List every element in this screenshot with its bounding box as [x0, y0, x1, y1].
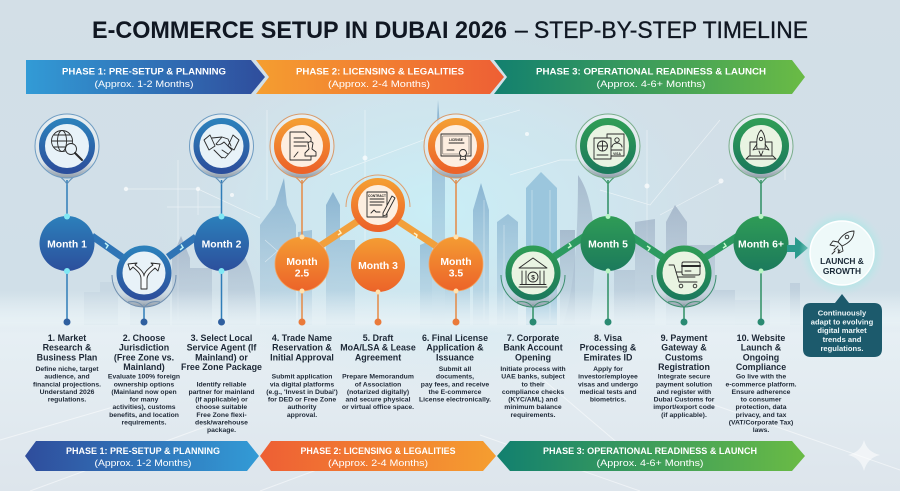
- timeline connectors: [92, 221, 738, 258]
- step 7 text: Bank Account: [503, 343, 563, 353]
- step 1 text: Understand 2026: [40, 389, 95, 396]
- step 8 text: Apply for: [593, 366, 623, 373]
- step 6 text: Application &: [426, 343, 484, 353]
- month 6+ node: Month 6+: [738, 240, 784, 250]
- step 8 text: visas and undergo: [578, 381, 638, 388]
- step 5 text: of Association: [355, 381, 401, 388]
- banner: phase 3 bottom: [497, 441, 805, 471]
- step 3 text: [181, 333, 262, 434]
- step 10 text: privacy, and tax: [736, 412, 787, 419]
- icon: market research globe: [35, 114, 99, 184]
- city skyline: [0, 100, 900, 334]
- step 7 text: compliance checks: [502, 389, 564, 396]
- step 10 text: (VAT/Corporate Tax): [729, 419, 793, 426]
- step 2 text: Evaluate 100% foreign: [108, 374, 180, 381]
- step 9 text: and register with: [657, 389, 711, 396]
- banner: phase 3 bottom: PHASE 3: OPERATIONAL READINESS & LAUNCH: [543, 446, 757, 456]
- step 7 text: (KYC/AML) and: [508, 397, 558, 404]
- step 1 text: regulations.: [48, 397, 86, 404]
- step 9 text: Integrate secure: [658, 374, 710, 381]
- step 5 text: 5. Draft: [363, 333, 393, 343]
- step 1 text: financial projections.: [33, 381, 101, 388]
- step 4 text: for DED or Free Zone: [268, 397, 336, 404]
- step 7 text: Initiate process with: [500, 366, 566, 373]
- month 3 node: [351, 238, 405, 294]
- step 10 text: e-commerce platform.: [725, 381, 797, 388]
- step 7 text: UAE banks, subject: [501, 374, 565, 381]
- step 9 text: Dubai Customs for: [654, 397, 715, 404]
- banner: phase 1 top: [26, 60, 265, 94]
- top phase banners: [26, 60, 805, 94]
- month 3.5 node: [429, 234, 483, 294]
- step 1 text: [33, 333, 101, 404]
- step 7 text: to their: [521, 381, 545, 388]
- step 4 text: Reservation &: [272, 343, 332, 353]
- callout: continuous adaptation: digital market: [817, 326, 867, 335]
- step 5 text: (notarized digitally): [347, 389, 409, 396]
- icon: fork arrows: [112, 248, 176, 308]
- step 2 text: [108, 333, 180, 426]
- banner: phase 2 top: (Approx. 2-4 Months): [328, 78, 430, 89]
- step 2 text: benefits, and location: [109, 412, 179, 419]
- month 2 node: [194, 214, 249, 274]
- banner: phase 3 top: [494, 60, 805, 94]
- step 6 text: the E-commerce: [429, 389, 482, 396]
- title: E-COMMERCE SETUP IN DUBAI 2026: [92, 17, 507, 44]
- icon: handshake: [190, 114, 254, 184]
- step 9 text: 9. Payment: [661, 333, 707, 343]
- icon: contract: CONTRACT: [368, 194, 386, 198]
- step 5 text: Agreement: [355, 352, 401, 362]
- launch and growth badge: [799, 210, 885, 296]
- step 6 text: Submit all: [439, 366, 471, 373]
- step 2 text: (Free Zone vs.: [114, 352, 174, 362]
- launch and growth badge: LAUNCH &: [820, 256, 864, 266]
- step 8 text: [578, 333, 638, 404]
- step 1 text: audience, and: [44, 374, 90, 381]
- title: – STEP-BY-STEP TIMELINE: [515, 17, 808, 44]
- month 3.5 node: Month: [440, 257, 472, 268]
- callout: continuous adaptation: adapt to evolving: [811, 317, 874, 326]
- month 2 node: Month 2: [202, 240, 242, 250]
- step 3 text: Identify reliable: [197, 381, 247, 388]
- step 1 text: Research &: [43, 343, 92, 353]
- launch and growth badge: GROWTH: [823, 266, 861, 276]
- month 2.5 node: 2.5: [295, 268, 309, 280]
- step 4 text: Initial Approval: [270, 352, 334, 362]
- step 9 text: Registration: [658, 362, 710, 372]
- step 3 text: desk/warehouse: [195, 419, 248, 426]
- step 3 text: Mainland) or: [195, 352, 248, 362]
- icon: shopping cart: [652, 248, 716, 308]
- step 4 text: authority: [287, 404, 317, 411]
- step 2 text: Mainland): [123, 362, 165, 372]
- icon: document and stamp: [270, 114, 334, 184]
- step 9 text: Gateway &: [661, 343, 707, 353]
- step 9 text: (if applicable).: [661, 412, 707, 419]
- step 8 text: medical tests and: [579, 389, 637, 396]
- month 6+ node: [734, 214, 788, 274]
- banner: phase 1 bottom: (Approx. 1-2 Months): [94, 457, 192, 468]
- step 3 text: 3. Select Local: [191, 333, 252, 343]
- step 8 text: 8. Visa: [594, 333, 622, 343]
- callout: continuous adaptation: Continuously: [818, 308, 867, 318]
- stems: [64, 180, 764, 326]
- banner: phase 1 top: (Approx. 1-2 Months): [94, 78, 194, 89]
- step 6 text: License electronically.: [419, 397, 491, 404]
- step 10 text: Go live with the: [736, 374, 786, 381]
- step 3 text: Free Zone flexi-: [196, 412, 247, 419]
- step 4 text: 4. Trade Name: [272, 333, 332, 343]
- step 2 text: 2. Choose: [123, 333, 165, 343]
- step 9 text: [653, 333, 715, 419]
- bottom phase banners: [25, 441, 805, 471]
- icon: sparkle watermark: [848, 440, 880, 471]
- step 3 text: Service Agent (If: [187, 343, 256, 353]
- icon: bank: $: [531, 274, 535, 282]
- month 1 node: Month 1: [47, 240, 87, 250]
- step 7 text: [500, 333, 566, 419]
- step 5 text: MoA/LSA & Lease: [340, 343, 416, 353]
- step 7 text: Opening: [515, 352, 551, 362]
- banner: phase 1 bottom: PHASE 1: PRE-SETUP & PLANNING: [66, 446, 220, 456]
- icon: passport and visa: VISA: [613, 152, 621, 156]
- step 3 text: choose suitable: [196, 404, 247, 411]
- icon: license certificate: [424, 114, 488, 184]
- step 8 text: Processing &: [580, 343, 637, 353]
- step 1 text: Define niche, target: [35, 366, 99, 373]
- step 6 text: Issuance: [436, 352, 474, 362]
- month 5 node: Month 5: [588, 240, 628, 250]
- step 3 text: Free Zone Package: [181, 362, 262, 372]
- step 2 text: ownership options: [114, 381, 174, 388]
- callout: continuous adaptation: trends and: [823, 335, 862, 344]
- month 3.5 node: 3.5: [449, 268, 463, 280]
- month 1 node: [40, 214, 94, 274]
- step 5 text: Prepare Memorandum: [342, 374, 414, 381]
- step 9 text: payment solution: [656, 381, 712, 388]
- banner: phase 3 top: PHASE 3: OPERATIONAL READINESS & LAUNCH: [536, 66, 766, 76]
- step 2 text: requirements.: [122, 419, 167, 426]
- step 3 text: (if applicable) or: [195, 397, 248, 404]
- step 8 text: Emirates ID: [584, 352, 633, 362]
- step 10 text: [725, 333, 797, 434]
- banner: phase 2 top: PHASE 2: LICENSING & LEGALITIES: [296, 66, 464, 76]
- banner: phase 2 bottom: PHASE 2: LICENSING & LEGALITIES: [300, 446, 456, 456]
- step 3 text: package.: [207, 427, 236, 434]
- callout: continuous adaptation: regulations.: [820, 344, 864, 353]
- step 10 text: laws.: [753, 427, 769, 434]
- step 6 text: 6. Final License: [422, 333, 488, 343]
- banner: phase 2 bottom: [260, 441, 496, 471]
- month 2.5 node: [275, 234, 329, 294]
- icon: bank: [501, 248, 565, 308]
- step 4 text: Submit application: [272, 374, 332, 381]
- step 4 text: [266, 333, 338, 419]
- step 10 text: 10. Website: [737, 333, 785, 343]
- banner: phase 3 bottom: (Approx. 4-6+ Months): [596, 457, 704, 468]
- step 7 text: 7. Corporate: [507, 333, 559, 343]
- step 9 text: import/export code: [653, 404, 715, 411]
- step 10 text: Compliance: [736, 362, 786, 372]
- icon: rocket and laptop: [729, 114, 793, 184]
- step 7 text: minimum balance: [504, 404, 562, 411]
- month 3 node: Month 3: [358, 261, 398, 272]
- step 8 text: biometrics.: [590, 397, 626, 404]
- step 2 text: (Mainland now open: [111, 389, 177, 396]
- banner: phase 2 top: [256, 60, 504, 94]
- step 2 text: Jurisdiction: [119, 343, 169, 353]
- step 1 text: 1. Market: [48, 333, 86, 343]
- title: [92, 17, 808, 44]
- step 6 text: [419, 333, 491, 404]
- step 1 text: Business Plan: [37, 352, 97, 362]
- callout: continuous adaptation: [803, 294, 882, 357]
- step 9 text: Customs: [665, 352, 703, 362]
- step 10 text: protection, data: [736, 404, 787, 411]
- step 2 text: activities), customs: [112, 404, 176, 411]
- step 10 text: Ensure adherence: [732, 389, 791, 396]
- banner: phase 1 top: PHASE 1: PRE-SETUP & PLANNING: [62, 66, 226, 76]
- step 6 text: documents,: [436, 374, 474, 381]
- banner: phase 3 top: (Approx. 4-6+ Months): [596, 78, 706, 89]
- banner: phase 2 bottom: (Approx. 2-4 Months): [328, 457, 428, 468]
- month 5 node: [580, 214, 636, 274]
- step 10 text: to consumer: [741, 397, 782, 404]
- step 2 text: for many: [130, 397, 159, 404]
- step 7 text: requirements.: [511, 412, 556, 419]
- icon: license certificate: LICENSE: [449, 138, 463, 142]
- step 8 text: investor/employee: [578, 374, 638, 381]
- step 10 text: Launch &: [741, 343, 782, 353]
- step 4 text: approval.: [287, 412, 317, 419]
- icon: passport and visa: [576, 114, 640, 184]
- banner: phase 1 bottom: [25, 441, 259, 471]
- step 4 text: via digital platforms: [270, 381, 334, 388]
- icon: contract: [346, 175, 410, 228]
- step 4 text: (e.g., 'Invest in Dubai'): [266, 389, 338, 396]
- step 5 text: or virtual office space.: [342, 404, 414, 411]
- month 2.5 node: Month: [286, 257, 318, 268]
- step 6 text: pay fees, and receive: [421, 381, 489, 388]
- step 5 text: [340, 333, 416, 411]
- arrow to launch: [787, 237, 808, 259]
- step 3 text: partner for mainland: [188, 389, 255, 396]
- step 5 text: and secure physical: [346, 397, 411, 404]
- step 10 text: Ongoing: [743, 352, 779, 362]
